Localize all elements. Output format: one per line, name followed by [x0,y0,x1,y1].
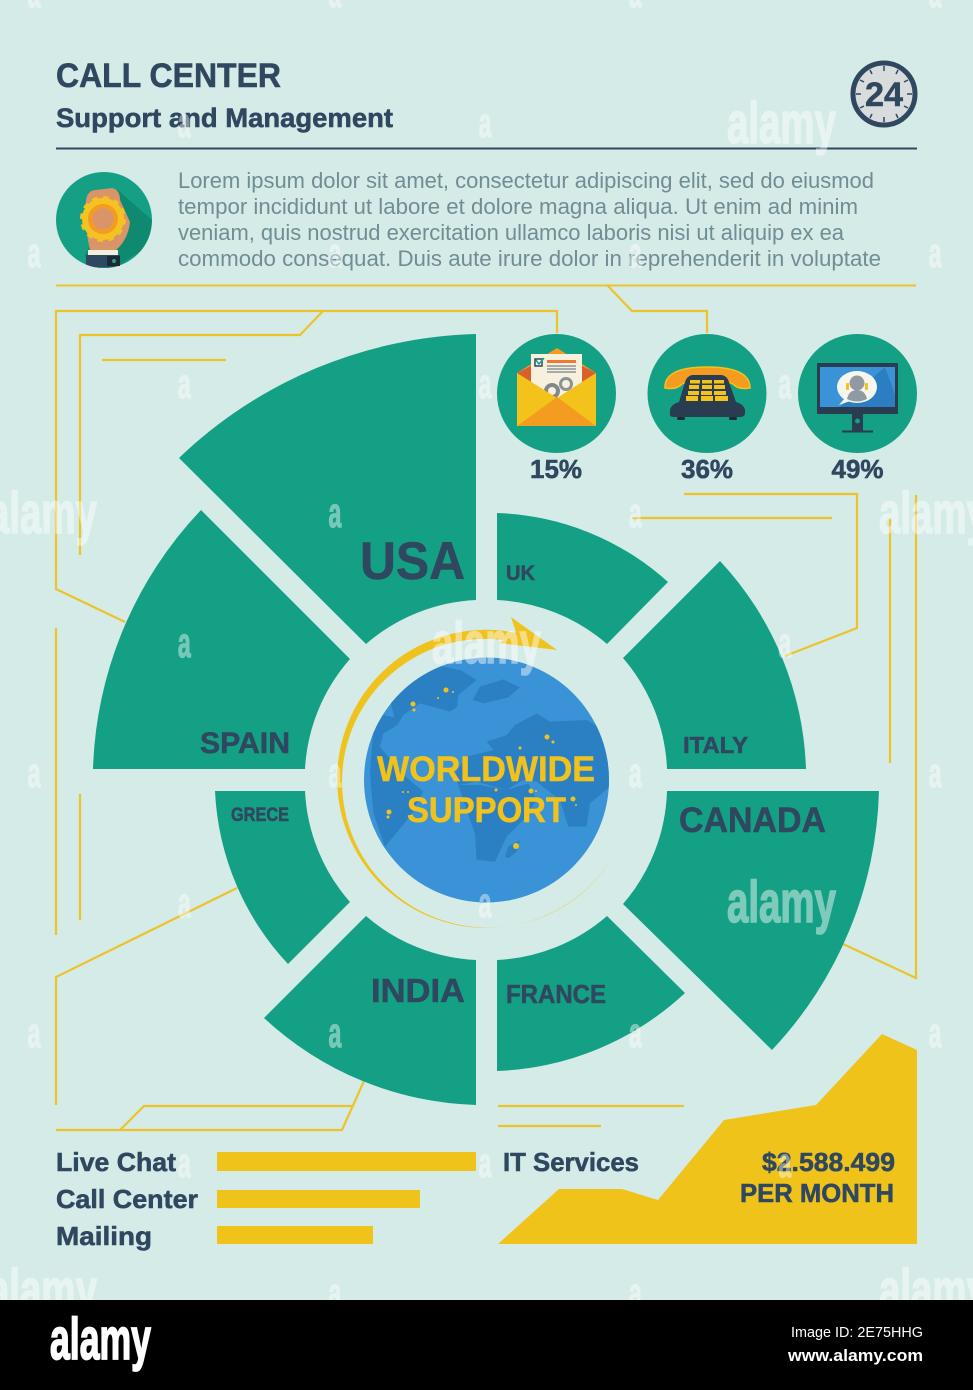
segment: Canada: CANADA [679,801,826,840]
watermarks: a [178,620,191,667]
watermarks: a [629,750,642,797]
intro paragraph [178,168,881,271]
label: 15%: 15% [530,454,582,484]
icon: telephone 36% [648,334,766,453]
segment: India [264,916,476,1105]
bar: Mailing [56,1221,373,1251]
area chart: IT services: $2.588.499 [762,1147,895,1177]
bar: Mailing: Mailing [56,1221,152,1251]
icon: envelope 15% [497,334,616,453]
segment: Spain [93,510,350,769]
globe: worldwide support: SUPPORT [407,791,566,830]
segment: Italy [623,561,806,769]
watermarks: a [929,1010,942,1057]
watermarks: a [479,880,492,927]
segment: UK: UK [506,562,535,585]
watermarks: a [479,361,492,408]
footer bar: Image ID: 2E75HHG [791,1324,923,1341]
watermarks: a [629,1010,642,1057]
intro paragraph: commodo consequat. Duis aute irure dolor in reprehenderit in voluptate [178,246,881,271]
segment: UK [497,513,668,644]
bar: Live Chat: Live Chat [56,1147,176,1177]
intro paragraph: tempor incididunt ut labore et dolore magna aliqua. Ut enim ad minim [178,194,858,219]
watermarks: a [479,100,492,147]
bar chart: services [56,1147,476,1251]
bar: Live Chat [56,1147,476,1177]
icon: hand holding gear [56,172,152,268]
bar: Call Center: Call Center [56,1184,198,1214]
connector lines [56,286,916,1130]
segment: Canada [623,791,879,1050]
footer bar: www.alamy.com [787,1346,923,1365]
watermarks: alamy [727,91,836,156]
segment: France: FRANCE [506,979,606,1009]
watermarks: a [329,230,342,277]
icon: monitor with headset agent 49% [798,334,917,453]
watermarks: a [178,880,191,927]
watermarks: a [479,1140,492,1187]
watermarks: a [778,1140,792,1187]
watermarks: a [329,490,342,537]
watermarks: a [778,361,792,408]
globe: worldwide support [364,658,610,902]
watermarks: a [929,750,942,797]
segment: Grece: GRECE [231,805,289,826]
watermarks: a [629,490,642,537]
title: CALL CENTER [56,57,281,95]
segment: France [497,916,685,1071]
watermarks: a [178,1140,191,1187]
header rule [56,148,917,150]
watermarks: a [329,1010,342,1057]
area chart: IT services: IT Services [503,1147,639,1177]
segment: Grece [215,791,350,964]
watermarks: a [329,1270,342,1317]
watermarks: a [178,361,191,408]
watermarks: alamy [432,611,541,676]
segment: India: INDIA [371,972,465,1009]
area chart: IT services [498,1034,917,1244]
watermarks: a [629,1270,642,1317]
label: 49%: 49% [832,454,884,484]
watermarks: a [778,620,792,667]
bar: Call Center [56,1184,420,1214]
intro paragraph: veniam, quis nostrud exercitation ullamco laboris nisi ut aliquip ex ea [178,220,845,245]
watermarks: a [178,100,191,147]
footer bar [0,1300,973,1390]
footer bar: alamy [50,1307,151,1372]
area chart: IT services: PER MONTH [740,1178,894,1208]
yellow rule [56,284,916,286]
segment: Italy: ITALY [683,732,748,758]
subtitle: Support and Management [56,103,393,133]
watermarks: a [28,750,41,797]
segment: USA [179,334,476,644]
watermarks: alamy [727,870,836,935]
icon: 24 hour clock [853,63,915,125]
radial chart of countries [93,334,879,1105]
watermarks: a [28,230,41,277]
intro paragraph: Lorem ipsum dolor sit amet, consectetur adipiscing elit, sed do eiusmod [178,168,874,193]
icon: 24 hour clock: 24 [865,76,903,114]
segment: Spain: SPAIN [200,727,290,760]
segment: USA: USA [360,532,465,591]
globe: worldwide support: WORLDWIDE [377,750,595,789]
watermarks: a [929,230,942,277]
label: 36%: 36% [681,454,733,484]
watermarks: a [629,230,642,277]
watermarks: a [28,1010,41,1057]
watermarks: a [329,750,342,797]
arrow swoosh around globe [337,617,613,928]
